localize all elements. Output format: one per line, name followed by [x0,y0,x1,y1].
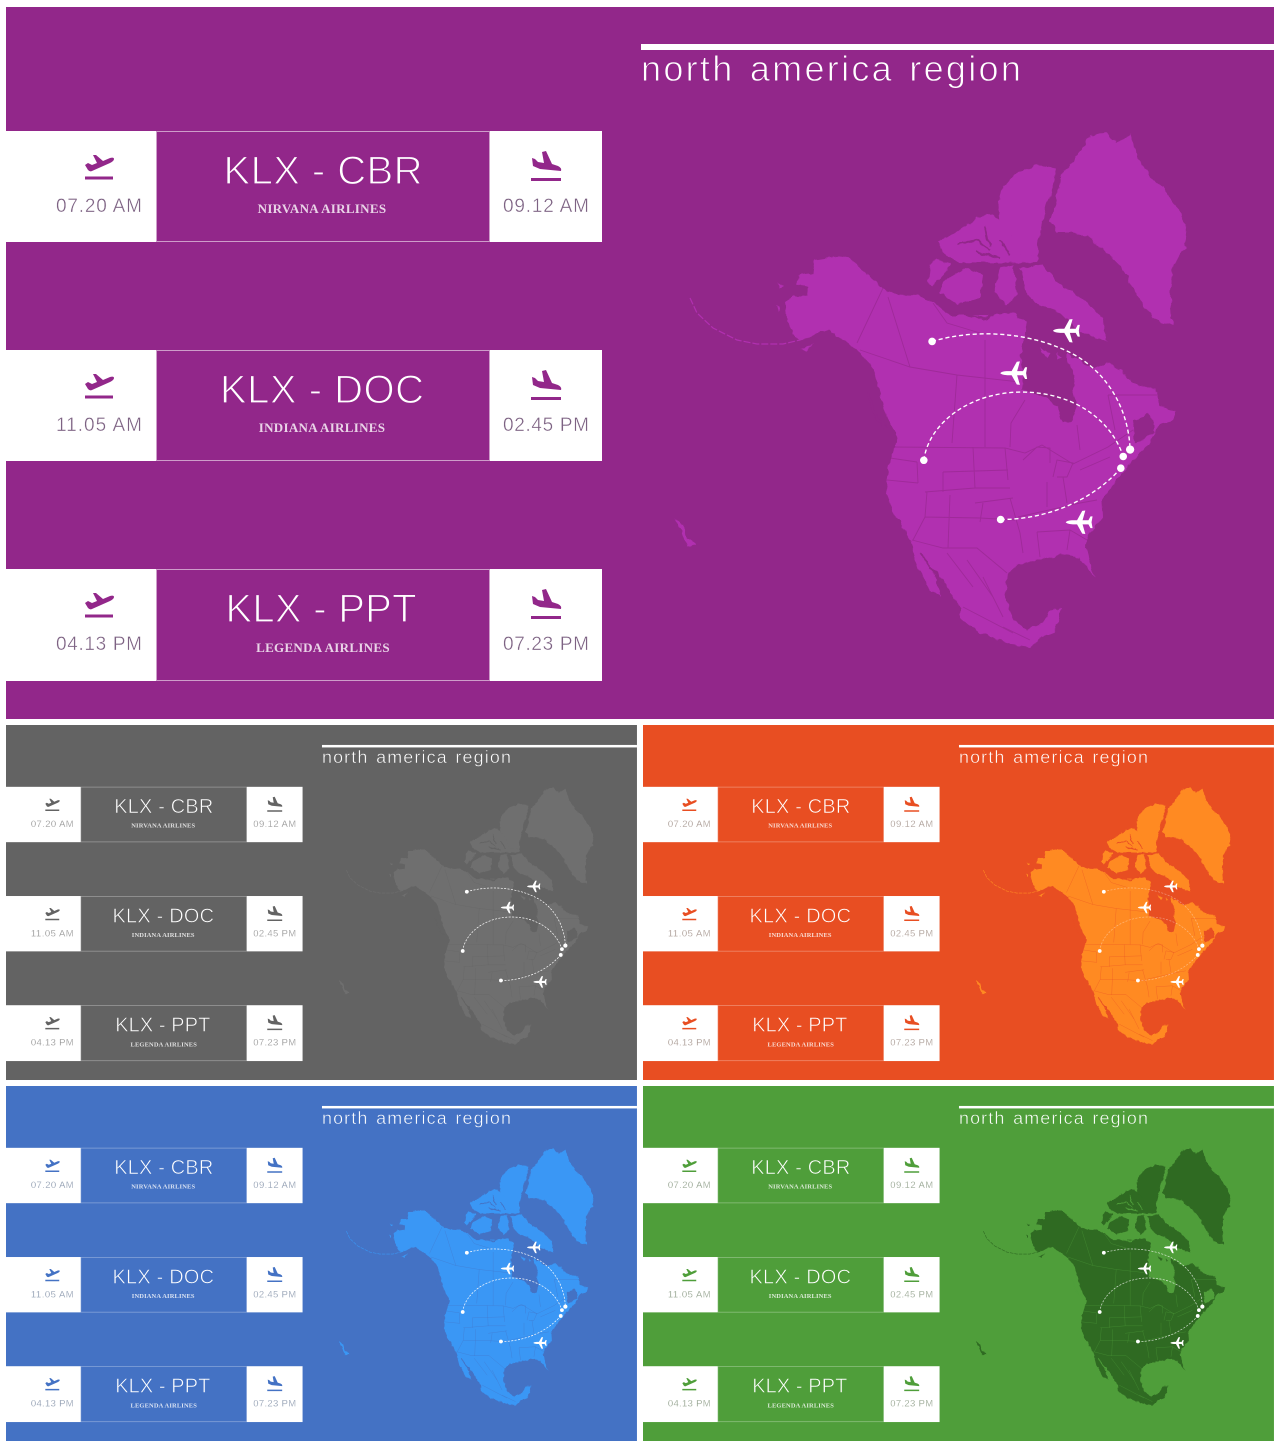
flight row: KLX - PPT [6,569,602,681]
flight row: KLX - DOC: 02.45 PM [253,928,297,939]
panel: green north america region [643,1086,1274,1441]
flight row: KLX - DOC: KLX - DOC [220,368,424,412]
heading: north america region: north america region [641,48,1023,89]
flight row: KLX - DOC [6,350,602,461]
flight row: KLX - CBR [643,1148,940,1203]
flight row: KLX - DOC: INDIANA AIRLINES [259,420,385,435]
flight row: KLX - PPT: 04.13 PM [668,1399,711,1410]
flight row: KLX - DOC: 11.05 AM [31,1289,74,1300]
flight row: KLX - DOC: INDIANA AIRLINES [132,1293,195,1300]
heading: north america region: north america region [959,1108,1149,1128]
heading: north america region: north america region [322,747,512,767]
flight row: KLX - CBR [6,1148,303,1203]
flight row: KLX - PPT: KLX - PPT [752,1015,847,1037]
flight row: KLX - CBR: 09.12 AM [890,1180,934,1191]
flight row: KLX - PPT [643,1005,940,1061]
flight row: KLX - CBR: KLX - CBR [114,1157,213,1179]
panel: grey north america region [6,725,637,1080]
flight row: KLX - DOC: 02.45 PM [503,415,590,436]
map with flight routes [339,1149,594,1405]
flight row: KLX - DOC [643,1257,940,1312]
flight row: KLX - PPT: 04.13 PM [668,1038,711,1049]
flight row: KLX - DOC: 02.45 PM [890,1289,934,1300]
flight row: KLX - PPT: 04.13 PM [31,1038,74,1049]
flight row: KLX - PPT: LEGENDA AIRLINES [130,1042,197,1049]
flight row: KLX - DOC [6,1257,303,1312]
flight row: KLX - PPT: 07.23 PM [253,1038,297,1049]
map with flight routes [976,1149,1231,1405]
flight row: KLX - CBR: NIRVANA AIRLINES [131,823,195,830]
panel: blue north america region [6,1086,637,1441]
flight row: KLX - PPT: LEGENDA AIRLINES [767,1042,834,1049]
map with flight routes [339,788,594,1044]
flight row: KLX - PPT: 07.23 PM [253,1399,297,1410]
flight row: KLX - DOC: KLX - DOC [749,905,851,927]
flight row: KLX - CBR: 07.20 AM [668,1180,711,1191]
flight row: KLX - DOC: 11.05 AM [56,415,143,436]
flight row: KLX - CBR: KLX - CBR [224,149,422,193]
flight row: KLX - CBR: NIRVANA AIRLINES [768,823,832,830]
flight row: KLX - CBR: 09.12 AM [890,819,934,830]
map with flight routes [976,788,1231,1044]
flight row: KLX - DOC: INDIANA AIRLINES [769,1293,832,1300]
flight row: KLX - CBR: 09.12 AM [503,196,590,217]
flight row: KLX - PPT: 04.13 PM [31,1399,74,1410]
flight row: KLX - CBR: 09.12 AM [253,819,297,830]
flight row: KLX - DOC: KLX - DOC [112,905,214,927]
flight row: KLX - DOC: 11.05 AM [668,928,711,939]
flight row: KLX - CBR: KLX - CBR [114,796,213,818]
flight row: KLX - CBR: 09.12 AM [253,1180,297,1191]
flight row: KLX - CBR [643,787,940,842]
flight row: KLX - CBR [6,787,303,842]
flight row: KLX - PPT: 04.13 PM [56,634,143,655]
flight row: KLX - PPT [643,1366,940,1422]
flight row: KLX - CBR: KLX - CBR [751,796,850,818]
flight row: KLX - DOC [643,896,940,951]
flight row: KLX - PPT: KLX - PPT [226,587,416,631]
flight row: KLX - CBR [6,131,602,242]
heading: north america region [641,44,1274,89]
flight row: KLX - CBR: 07.20 AM [31,819,74,830]
flight row: KLX - DOC: INDIANA AIRLINES [769,932,832,939]
flight row: KLX - DOC: 02.45 PM [890,928,934,939]
flight row: KLX - DOC: KLX - DOC [112,1266,214,1288]
flight row: KLX - PPT: LEGENDA AIRLINES [130,1403,197,1410]
flight row: KLX - PPT: KLX - PPT [115,1376,210,1398]
flight row: KLX - PPT [6,1366,303,1422]
flight row: KLX - DOC: INDIANA AIRLINES [132,932,195,939]
flight row: KLX - DOC: KLX - DOC [749,1266,851,1288]
flight row: KLX - CBR: 07.20 AM [31,1180,74,1191]
flight row: KLX - PPT: 07.23 PM [890,1038,934,1049]
panel: orange north america region [643,725,1274,1080]
flight row: KLX - PPT: 07.23 PM [890,1399,934,1410]
flight row: KLX - CBR: 07.20 AM [668,819,711,830]
flight row: KLX - PPT: LEGENDA AIRLINES [767,1403,834,1410]
map with flight routes [675,133,1187,647]
flight row: KLX - PPT [6,1005,303,1061]
flight row: KLX - CBR: KLX - CBR [751,1157,850,1179]
panel: purple north america region [6,7,1274,719]
heading: north america region: north america region [959,747,1149,767]
flight row: KLX - DOC: 11.05 AM [31,928,74,939]
flight row: KLX - CBR: 07.20 AM [56,196,143,217]
flight row: KLX - PPT: KLX - PPT [752,1376,847,1398]
flight row: KLX - DOC: 02.45 PM [253,1289,297,1300]
heading: north america region: north america region [322,1108,512,1128]
flight row: KLX - CBR: NIRVANA AIRLINES [131,1184,195,1191]
flight row: KLX - CBR: NIRVANA AIRLINES [258,201,386,216]
flight row: KLX - CBR: NIRVANA AIRLINES [768,1184,832,1191]
flight row: KLX - DOC [6,896,303,951]
flight row: KLX - PPT: 07.23 PM [503,634,590,655]
flight row: KLX - PPT: LEGENDA AIRLINES [256,640,390,655]
flight row: KLX - DOC: 11.05 AM [668,1289,711,1300]
flight row: KLX - PPT: KLX - PPT [115,1015,210,1037]
